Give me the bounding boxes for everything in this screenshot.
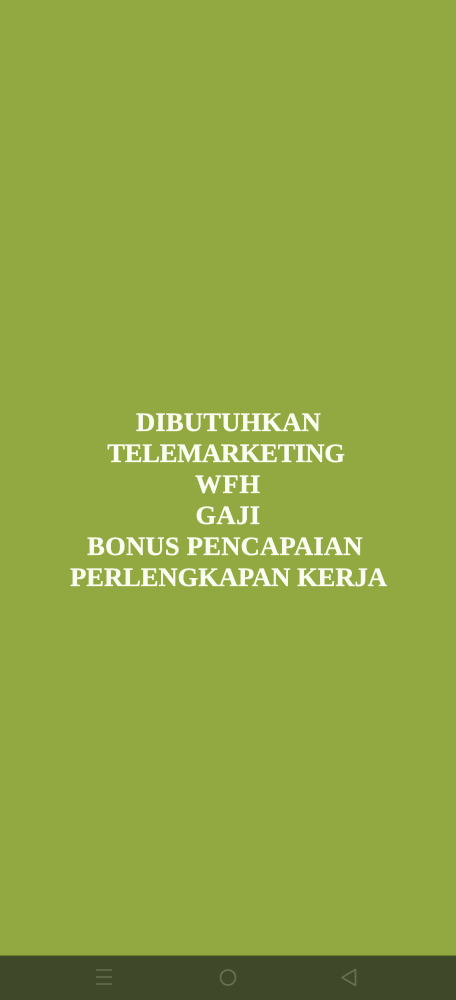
navigation bar xyxy=(0,955,456,1000)
heading text block: TELEMARKETING xyxy=(107,438,345,468)
heading text block: GAJI xyxy=(196,500,260,530)
heading text block: BONUS PENCAPAIAN xyxy=(87,531,363,561)
icon: menu xyxy=(96,970,112,984)
icon: home circle xyxy=(220,970,236,985)
heading text block: DIBUTUHKAN xyxy=(136,407,321,437)
heading text block: PERLENGKAPAN KERJA xyxy=(70,562,387,592)
heading text block xyxy=(70,407,387,592)
heading text block: WFH xyxy=(195,469,261,499)
icon: back triangle xyxy=(342,970,356,986)
